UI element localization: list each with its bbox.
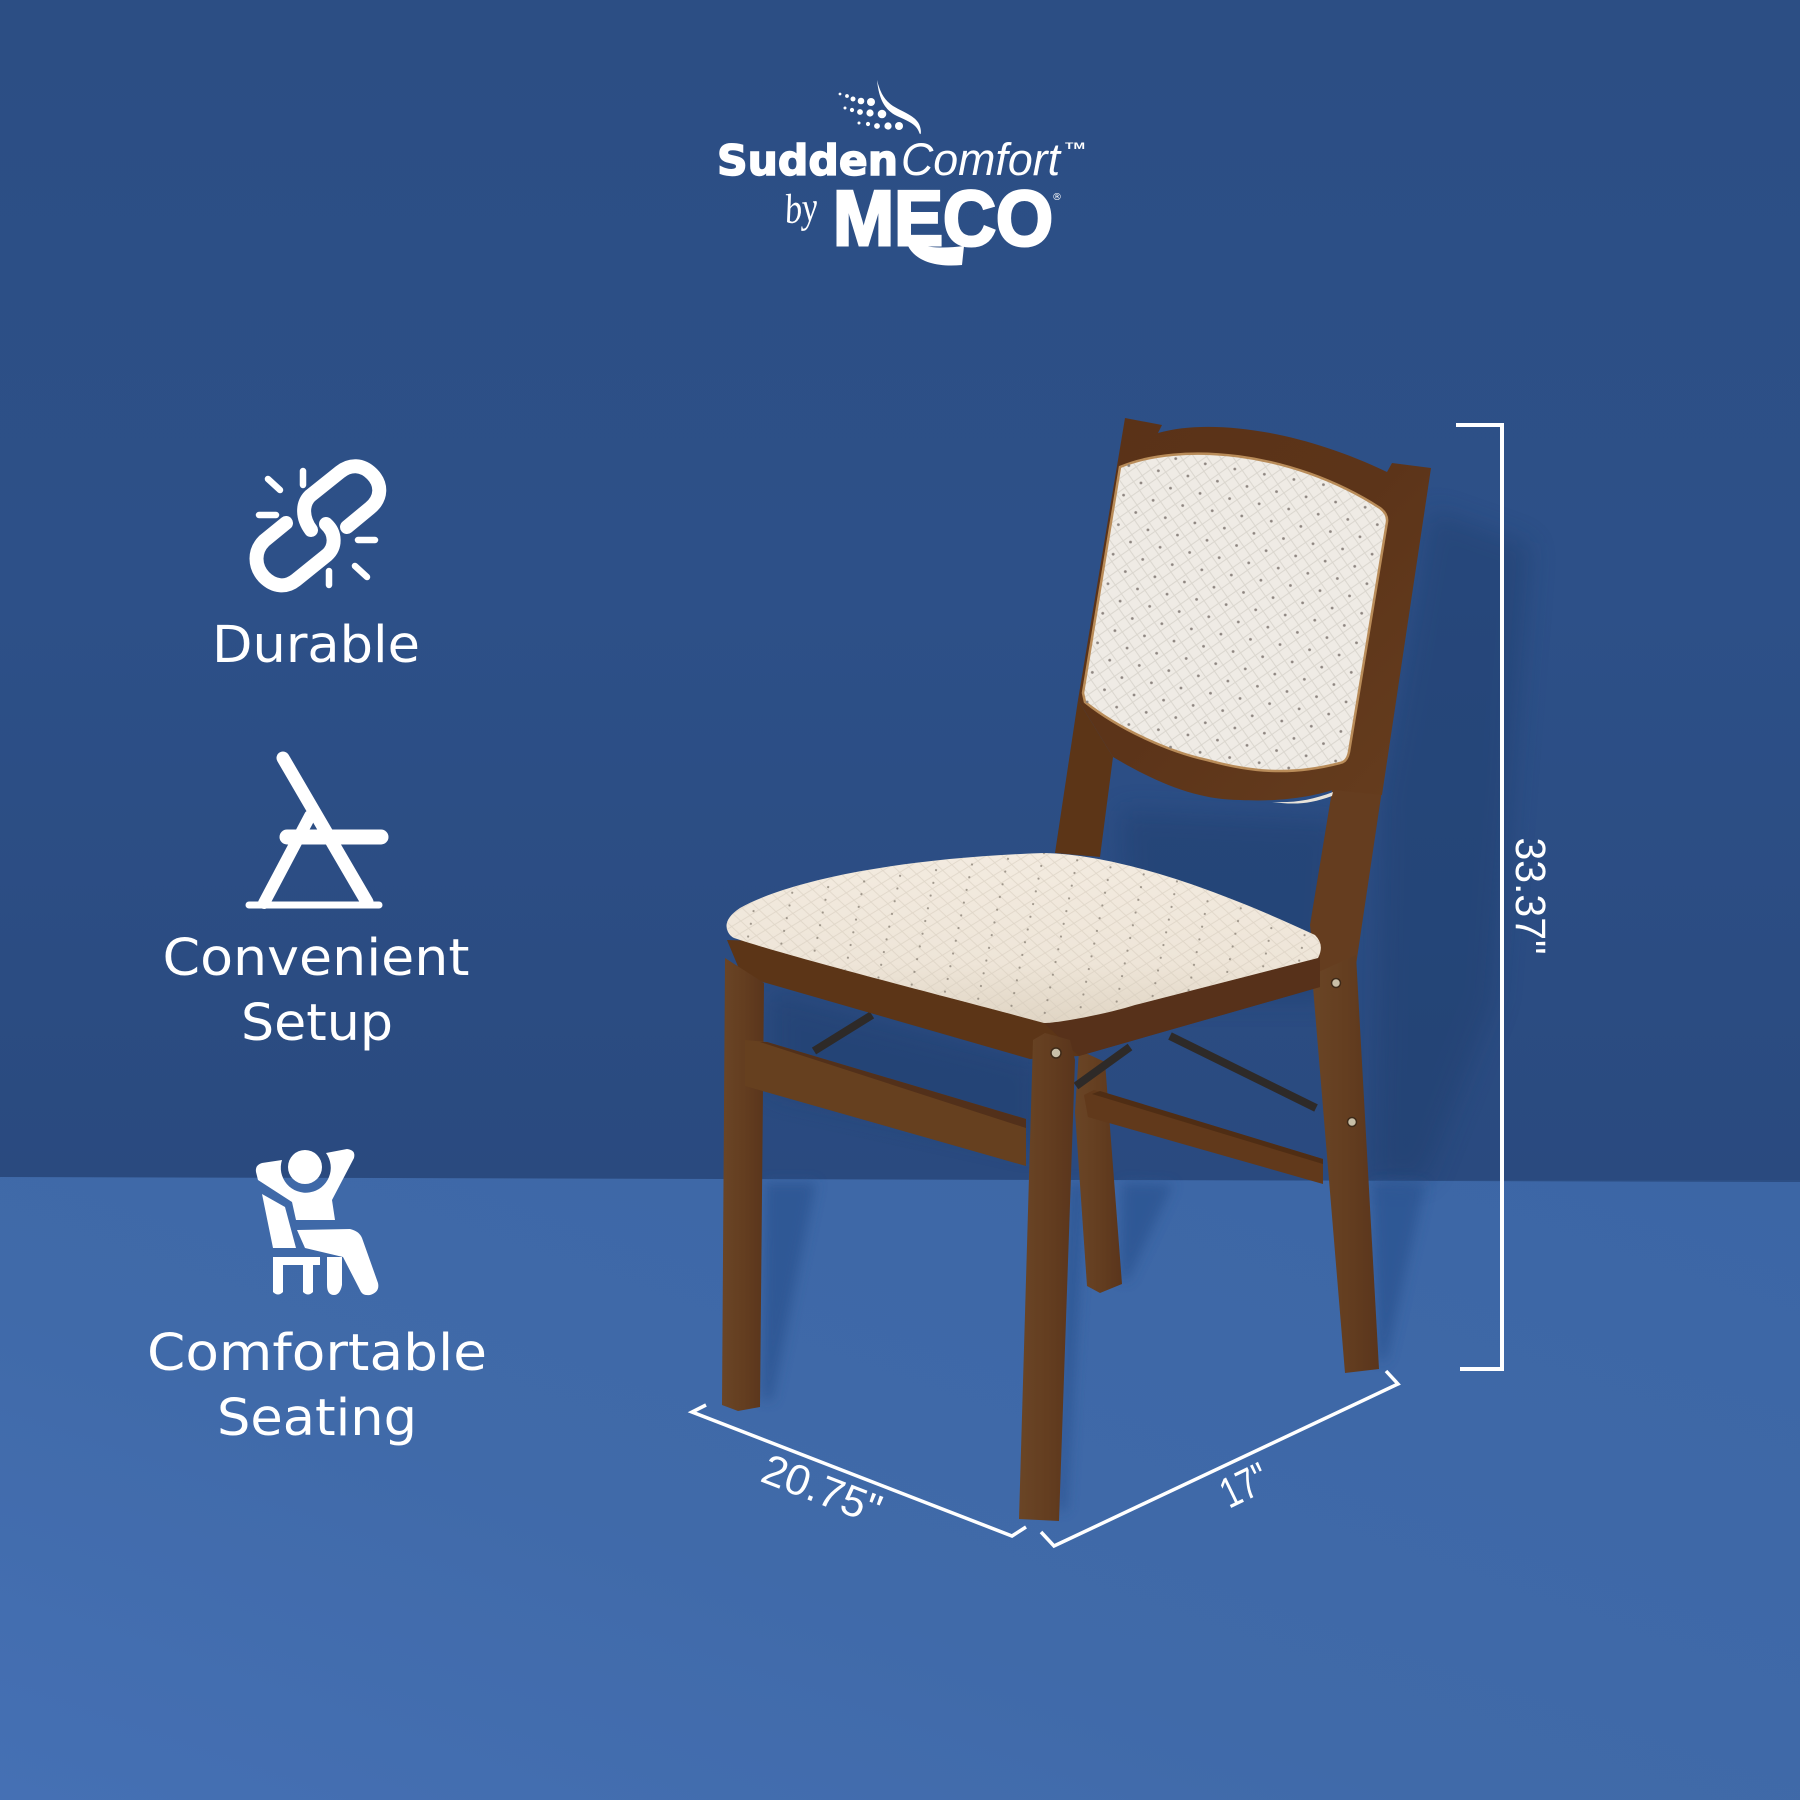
chair right stretcher bbox=[1084, 1090, 1323, 1184]
chair bolts bbox=[1051, 978, 1356, 1126]
feature: Durable bbox=[212, 466, 420, 675]
depth bracket bbox=[692, 1405, 1026, 1536]
feature: Comfortable Seating bbox=[147, 1149, 487, 1448]
background: lighter blue floor bbox=[0, 1177, 1800, 1800]
chair photo illustration bbox=[722, 418, 1431, 1521]
label: Convenient: Convenient bbox=[162, 929, 470, 988]
chair right rear leg bbox=[1312, 955, 1379, 1373]
label: Durable: Durable bbox=[212, 616, 420, 675]
depth label: 20.75" bbox=[755, 1445, 888, 1535]
chair back cushion bbox=[1083, 454, 1387, 771]
logo: SuddenComfort by MECO bbox=[717, 80, 1085, 266]
depth dimension bbox=[692, 1405, 1026, 1536]
feature: Convenient Setup bbox=[162, 758, 470, 1053]
chair wall shadow bbox=[770, 510, 1530, 1180]
background: blue wall bbox=[0, 0, 1800, 1180]
icon: chain link bbox=[256, 466, 379, 585]
logo swoosh and dots bbox=[839, 80, 921, 134]
logo trademark: TM bbox=[1065, 141, 1085, 151]
width dimension bbox=[1041, 1371, 1398, 1546]
height dimension bbox=[1456, 425, 1554, 1369]
chair cross braces bbox=[814, 1015, 1316, 1108]
chair left stretcher bbox=[745, 1040, 1026, 1166]
logo registered mark: ® bbox=[1052, 192, 1062, 203]
logo MECO: MECO bbox=[833, 174, 1053, 262]
chair right post bbox=[1310, 785, 1382, 1000]
logo wordmark Sudden: Sudden bbox=[717, 136, 898, 185]
white sliver under backrest bbox=[1272, 792, 1333, 804]
logo wordmark Comfort: Comfort bbox=[901, 134, 1062, 185]
height label: 33.37" bbox=[1506, 838, 1554, 954]
chair floor shadow bbox=[762, 1182, 1425, 1510]
width label: 17" bbox=[1212, 1454, 1277, 1518]
chair seat right apron shading bbox=[1044, 955, 1320, 1056]
icon: relaxed seated person bbox=[256, 1149, 378, 1295]
label: Setup: Setup bbox=[241, 994, 393, 1053]
chair seat apron bbox=[727, 940, 1320, 1059]
icon: folding chair bbox=[249, 758, 381, 905]
chair backrest frame bbox=[1078, 418, 1431, 800]
chair left upright bbox=[1055, 700, 1113, 857]
label: Comfortable: Comfortable bbox=[147, 1324, 487, 1383]
label: Seating: Seating bbox=[217, 1389, 417, 1448]
logo MECO swoosh bbox=[905, 236, 964, 266]
chair rear inner leg bbox=[1075, 1050, 1122, 1293]
chair front left leg bbox=[722, 958, 764, 1411]
chair front center leg bbox=[1019, 1033, 1075, 1521]
logo by: by bbox=[782, 184, 820, 233]
height bracket bbox=[1456, 425, 1502, 1369]
chair seat cushion bbox=[726, 853, 1321, 1023]
width bracket bbox=[1041, 1371, 1398, 1546]
